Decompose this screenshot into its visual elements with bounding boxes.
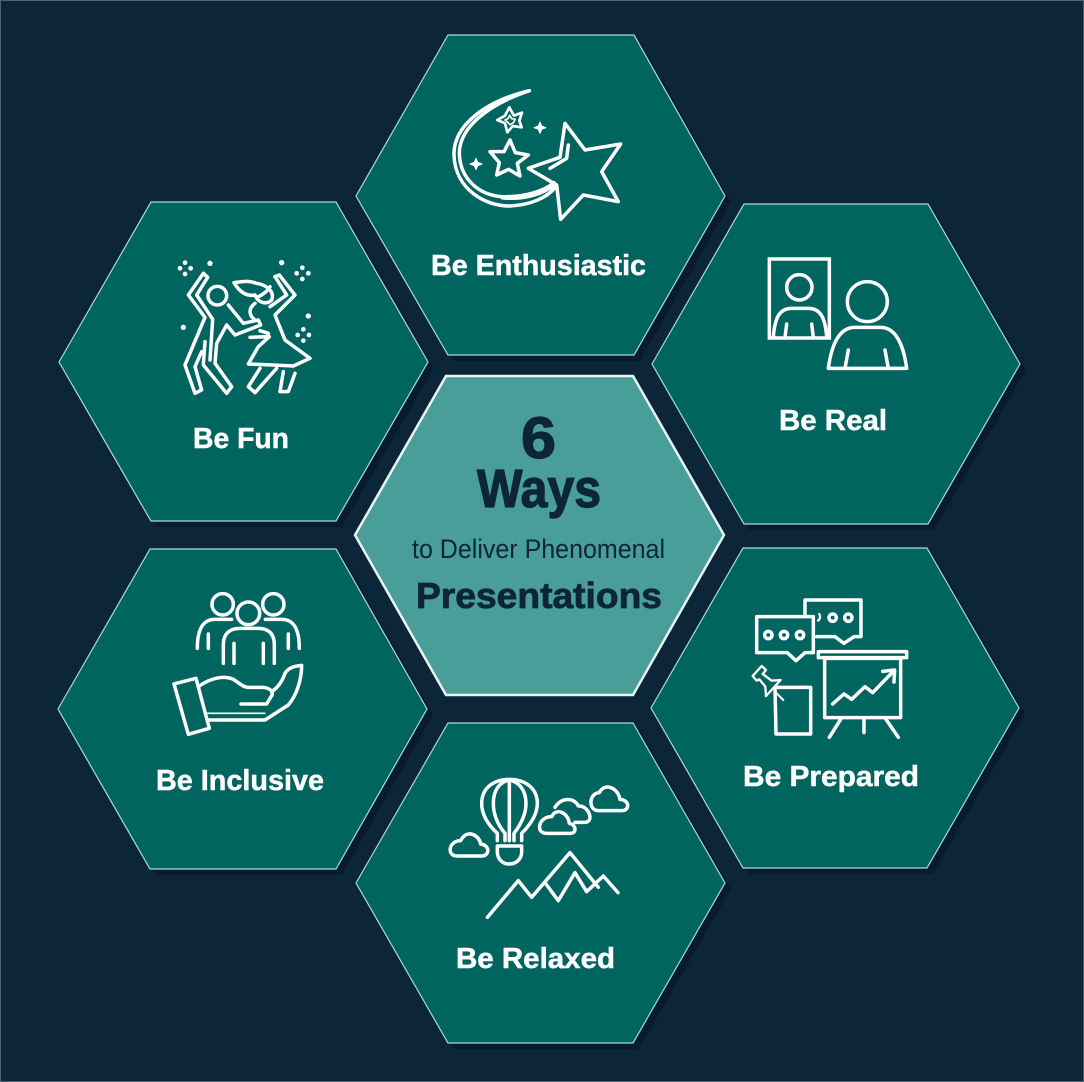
subheading: to Deliver Phenomenal (412, 534, 665, 564)
label: be real: Be Real (779, 405, 887, 437)
icon: shooting star (454, 91, 621, 219)
panel: be relaxed (356, 723, 731, 1049)
icon: person and portrait (769, 259, 907, 368)
heading: ways: Ways (477, 459, 601, 519)
panel: be real (652, 204, 1026, 530)
panel: center title (355, 376, 724, 695)
icon: chart and speech bubbles (753, 600, 907, 737)
icon: balloon and mountains (450, 779, 628, 917)
label: be inclusive: Be Inclusive (156, 765, 324, 797)
icon: dancing couple (178, 260, 311, 393)
panel: be enthusiastic (356, 35, 731, 361)
panel: be inclusive (58, 549, 433, 875)
label: be prepared: Be Prepared (743, 761, 919, 793)
label: be enthusiastic: Be Enthusiastic (431, 250, 646, 282)
heading: presentations: Presentations (416, 575, 662, 616)
label: be fun: Be Fun (193, 423, 289, 455)
icon: hand holding people (174, 594, 302, 734)
heading: 6: 6 (521, 406, 556, 471)
panel: be prepared (651, 548, 1025, 874)
panel: be fun (59, 202, 434, 527)
label: be relaxed: Be Relaxed (456, 943, 615, 975)
